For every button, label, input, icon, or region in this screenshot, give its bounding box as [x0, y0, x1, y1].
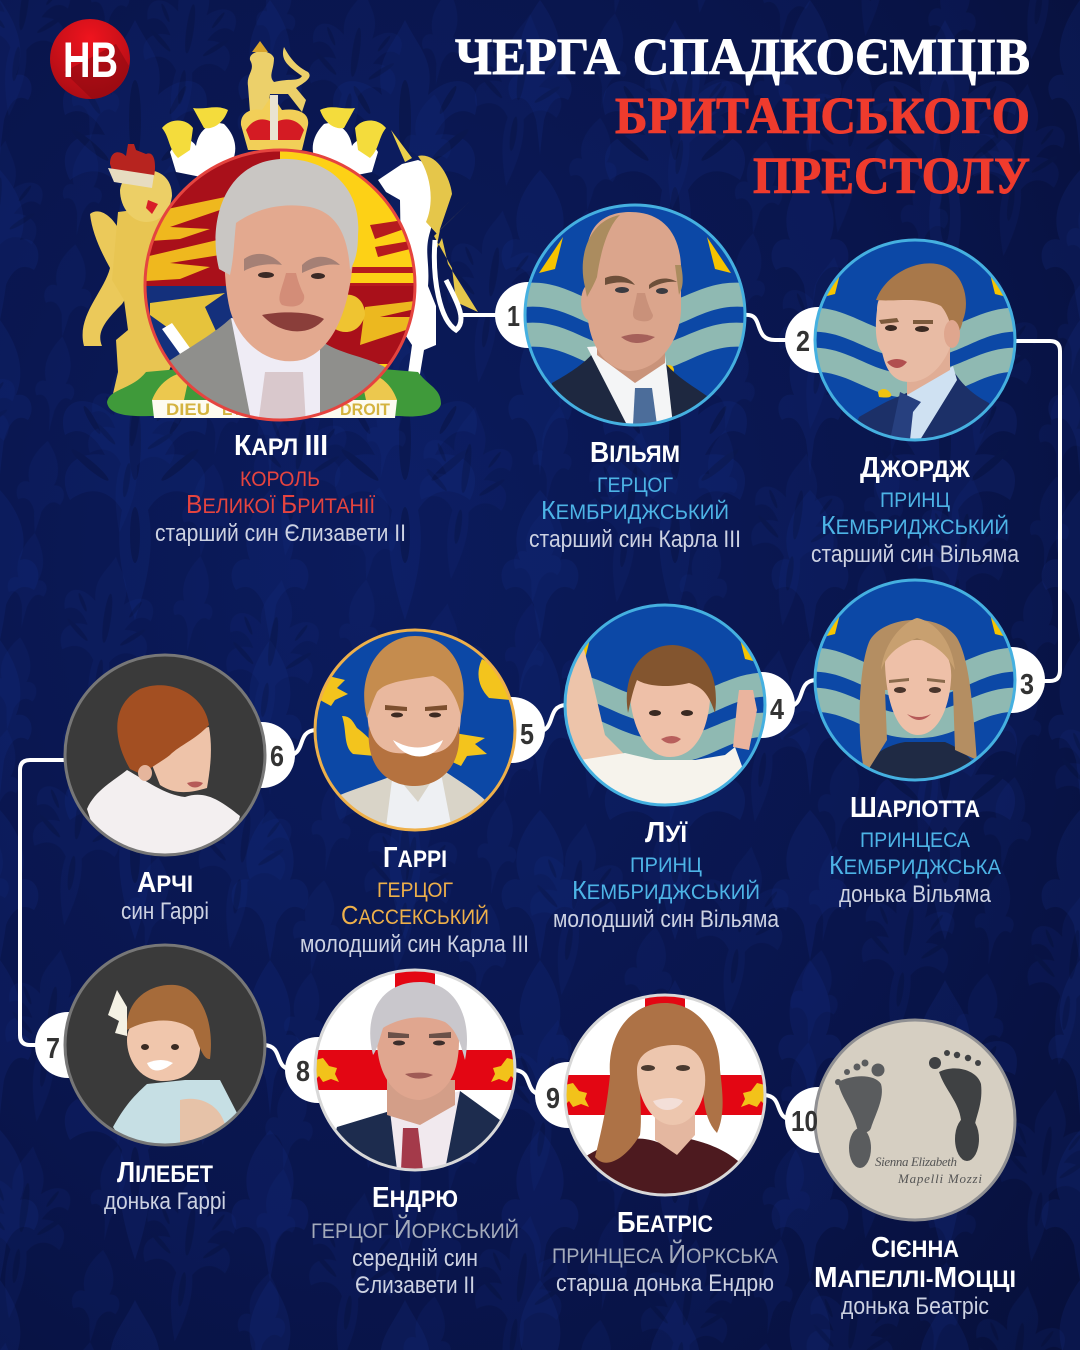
portrait: Лілебет — [66, 946, 264, 1144]
caption: Сієнна: МАПЕЛЛІ-МОЦЦІ — [814, 1262, 1016, 1294]
caption: Беатріс: БЕАТРІС — [617, 1207, 713, 1239]
caption: Гаррі: ГЕРЦОГ — [377, 879, 453, 902]
portrait border: Вільям — [525, 205, 745, 425]
portrait: Ендрю — [316, 972, 514, 1168]
caption: Вільям — [529, 437, 741, 553]
portrait border: Ендрю — [315, 970, 515, 1170]
caption: Ендрю — [311, 1182, 519, 1299]
caption: Вільям: КЕМБРИДЖСЬКИЙ — [541, 495, 729, 525]
caption: Карл III: старший син Єлизавети II — [155, 520, 406, 547]
title line 2: БРИТАНСЬКОГО — [615, 88, 1030, 145]
caption: Шарлотта — [829, 792, 1001, 908]
title line 1: ЧЕРГА СПАДКОЄМЦІВ — [455, 29, 1030, 86]
caption: Ендрю: ЕНДРЮ — [372, 1182, 458, 1214]
number badges — [35, 282, 1045, 1153]
right footprint — [929, 1050, 981, 1161]
caption: Шарлотта: ПРИНЦЕСА — [860, 829, 970, 852]
caption: Карл III: ВЕЛИКОЇ БРИТАНІЇ — [186, 489, 375, 519]
badge numbers: 2 — [796, 326, 810, 358]
caption: Гаррі: САССЕКСЬКИЙ — [341, 900, 489, 930]
caption: Сієнна: СІЄННА — [871, 1232, 959, 1264]
caption: Ендрю: середній син — [352, 1245, 478, 1272]
badge numbers: 10 — [791, 1106, 818, 1138]
caption: Гаррі: молодший син Карла III — [300, 931, 529, 958]
portrait: Арчі — [66, 656, 264, 854]
caption: Лілебет: ЛІЛЕБЕТ — [117, 1157, 213, 1189]
signature: Mapelli Mozzi — [897, 1171, 982, 1186]
lion supporter — [83, 144, 178, 398]
motto scroll: DROIT — [340, 400, 391, 419]
coat of arms — [83, 41, 478, 419]
crest lion and crown — [241, 41, 310, 150]
portrait: Беатріс — [566, 996, 764, 1194]
caption: Арчі — [121, 867, 209, 925]
signature — [875, 1158, 982, 1186]
caption: Лілебет — [104, 1157, 226, 1215]
caption: Ендрю: ГЕРЦОГ ЙОРКСЬКИЙ — [311, 1214, 519, 1244]
head — [224, 205, 353, 362]
portrait border: Гаррі — [315, 630, 515, 830]
portrait border: Лілебет — [65, 945, 265, 1145]
caption: Джордж: ДЖОРДЖ — [860, 452, 970, 484]
caption: Сієнна: донька Беатріс — [841, 1293, 989, 1320]
caption: Гаррі: ГАРРІ — [383, 842, 447, 874]
signature: Sienna Elizabeth — [875, 1154, 957, 1169]
connectors between portraits — [20, 315, 1060, 1120]
caption: Карл III: КОРОЛЬ — [240, 468, 320, 491]
caption: Джордж: КЕМБРИДЖСЬКИЙ — [821, 510, 1009, 540]
caption: Джордж — [811, 452, 1020, 568]
badge numbers: 9 — [546, 1083, 560, 1115]
caption: Карл III — [155, 430, 406, 547]
caption: Луї — [553, 817, 780, 933]
badge numbers: 8 — [296, 1056, 310, 1088]
caption: Карл III: КАРЛ III — [234, 430, 328, 462]
caption: Вільям: старший син Карла III — [529, 526, 741, 553]
caption: Вільям: ВІЛЬЯМ — [590, 437, 680, 469]
suit — [170, 318, 385, 416]
portrait border: Сієнна — [815, 1020, 1015, 1220]
caption: Джордж: ПРИНЦ — [880, 489, 950, 512]
caption: Вільям: ГЕРЦОГ — [597, 474, 673, 497]
portrait: Гаррі — [316, 632, 514, 828]
badge numbers: 7 — [46, 1033, 60, 1065]
badge numbers: 3 — [1020, 669, 1034, 701]
caption: Луї: ЛУЇ — [645, 817, 688, 849]
portrait: відбитки стоп Сієнни — [816, 1022, 1014, 1218]
caption: Лілебет: донька Гаррі — [104, 1188, 226, 1215]
badge numbers: 5 — [520, 719, 534, 751]
portrait border: Арчі — [65, 655, 265, 855]
portrait: Шарлотта — [816, 582, 1014, 778]
caption: Шарлотта: донька Вільяма — [839, 881, 992, 908]
caption: Арчі: син Гаррі — [121, 898, 209, 925]
motto scroll: ET — [222, 400, 243, 419]
logo: НВ — [50, 19, 130, 99]
badge numbers: 1 — [507, 301, 520, 333]
portrait: Джордж — [816, 242, 1014, 438]
portrait: Вільям — [525, 205, 745, 425]
portrait border: Джордж — [815, 240, 1015, 440]
mantling left — [170, 123, 235, 180]
title — [455, 29, 1030, 205]
badge numbers: 6 — [270, 741, 284, 773]
unicorn supporter — [378, 130, 478, 398]
caption: Беатріс: ПРИНЦЕСА ЙОРКСЬКА — [552, 1239, 778, 1269]
caption: Ендрю: Єлизавети II — [355, 1272, 475, 1299]
portrait border: Беатріс — [565, 995, 765, 1195]
mantling left gold — [162, 107, 228, 158]
caption: Сієнна — [814, 1232, 1016, 1320]
logo: НВ: НВ — [63, 32, 118, 88]
caption: Шарлотта: КЕМБРИДЖСЬКА — [829, 850, 1001, 880]
title line 3: ПРЕСТОЛУ — [753, 148, 1030, 205]
motto scroll — [152, 372, 397, 419]
mantling right — [313, 123, 378, 180]
caption: Луї: молодший син Вільяма — [553, 906, 780, 933]
caption: Луї: ПРИНЦ — [630, 854, 702, 877]
portrait border: Шарлотта — [815, 580, 1015, 780]
caption: Беатріс: старша донька Ендрю — [556, 1270, 774, 1297]
caption: Джордж: старший син Вільяма — [811, 541, 1020, 568]
caption: Арчі: АРЧІ — [137, 867, 193, 899]
badge numbers: 4 — [770, 694, 784, 726]
caption: Гаррі — [300, 842, 529, 958]
mantling right gold — [320, 107, 386, 158]
ground — [107, 368, 441, 416]
caption: Луї: КЕМБРИДЖСЬКИЙ — [572, 875, 760, 905]
caption: Шарлотта: ШАРЛОТТА — [850, 792, 980, 824]
motto scroll: DIEU — [166, 400, 210, 419]
portrait: Луї — [566, 606, 764, 804]
portrait border: Карл III — [145, 150, 415, 420]
portrait border: Луї — [565, 605, 765, 805]
caption: Беатріс — [552, 1207, 778, 1297]
badge numbers — [46, 301, 1034, 1138]
portrait: Карл III — [140, 145, 420, 426]
left footprint — [835, 1060, 884, 1168]
